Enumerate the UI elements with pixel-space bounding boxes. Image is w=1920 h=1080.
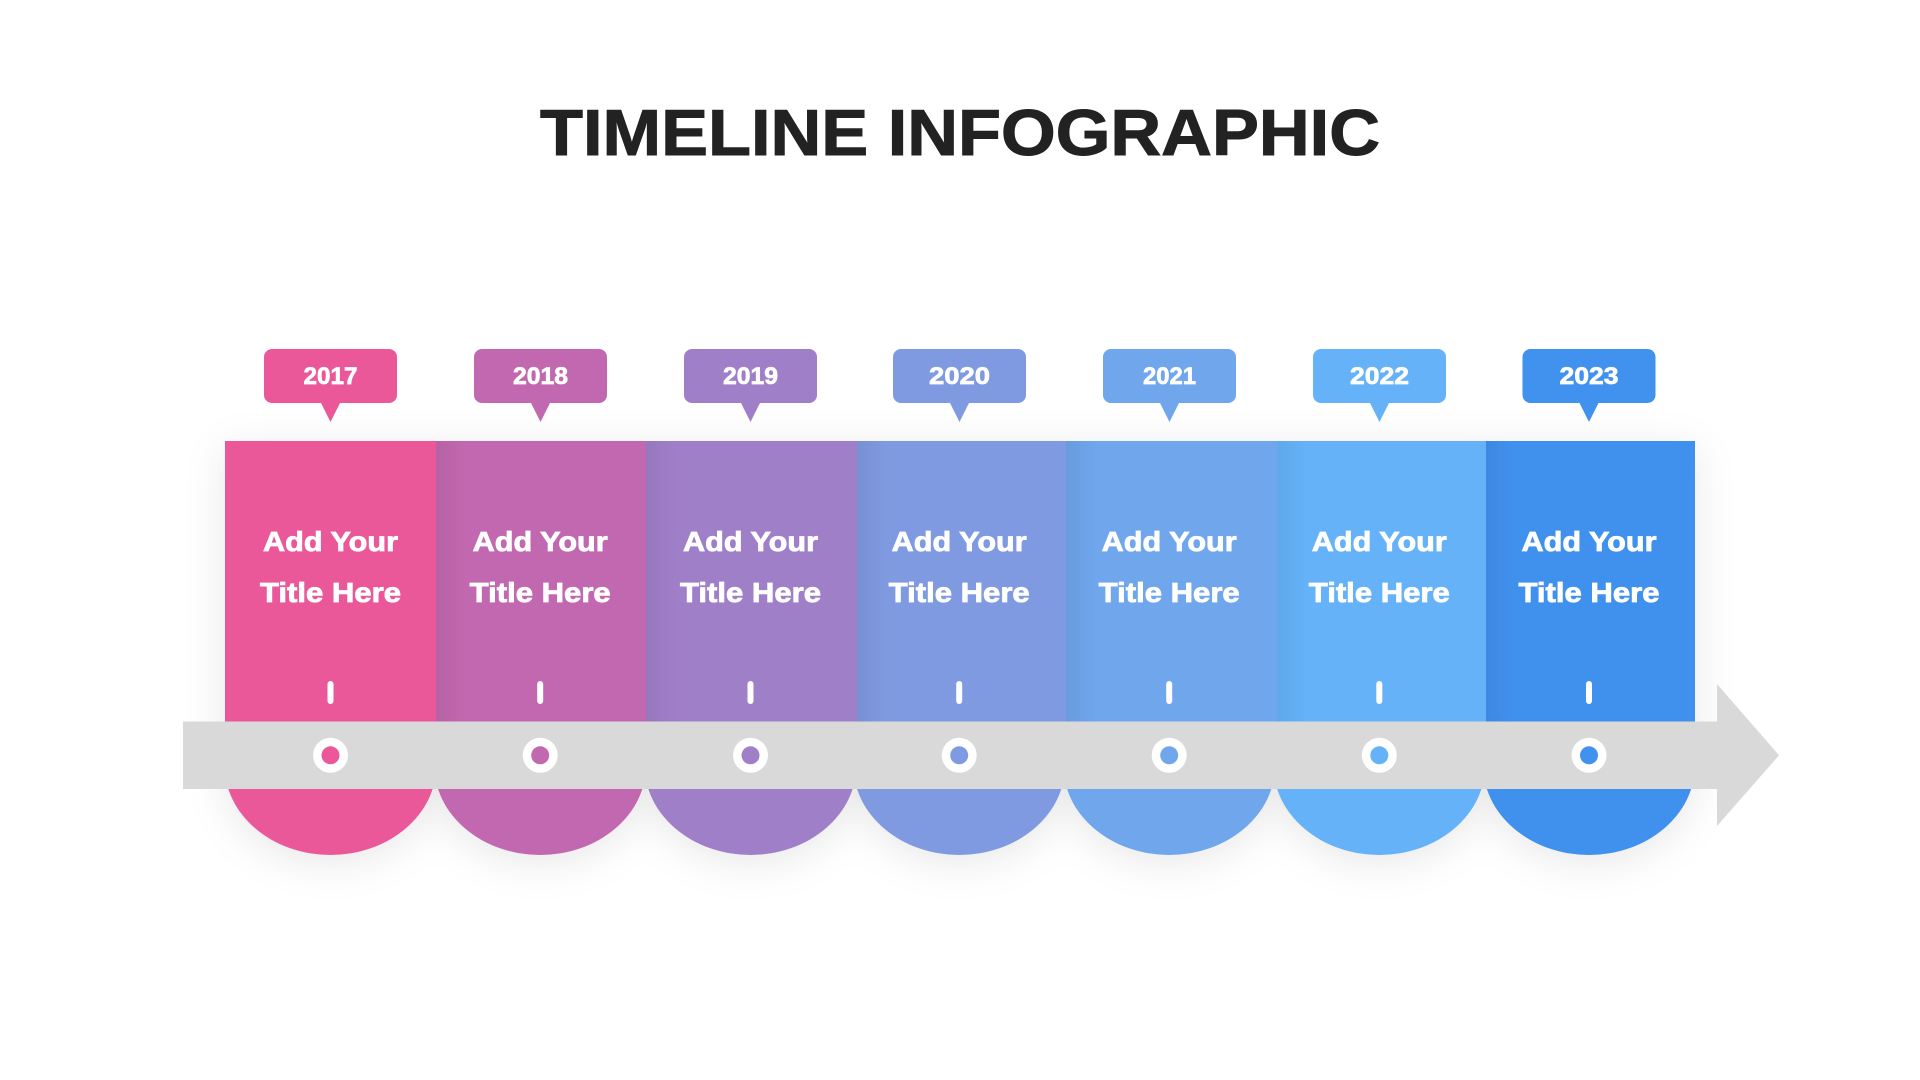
badge: 2018 [474,349,607,422]
tick marks [328,681,1592,704]
column: 2021 [1063,441,1277,855]
column title: 2018 [470,526,611,608]
column title: 2019: Add Your [683,526,818,557]
badge: 2021 [1103,349,1236,422]
column title: 2017: Title Here [260,577,401,608]
marker: 2021 [1152,738,1187,773]
column title: 2019 [680,526,821,608]
column title: 2020 [889,526,1030,608]
column title: 2018: Title Here [470,577,611,608]
column title: 2021: Title Here [1099,577,1240,608]
marker: 2019 [733,738,768,773]
badge: 2022 [1313,349,1446,422]
marker: 2020 [942,738,977,773]
badge: 2023: 2023 [1560,363,1618,390]
column: 2020 [853,441,1066,855]
column title: 2023: Add Your [1522,526,1657,557]
column title: 2018: Add Your [473,526,608,557]
column: 2023 [1483,441,1695,855]
column title: 2017 [260,526,401,608]
column: 2017 [224,441,436,855]
column title: 2022 [1309,526,1450,608]
marker: 2018 [523,738,558,773]
arrow: timeline bar [183,684,1779,826]
marker: 2017 [313,738,348,773]
column: 2018 [434,441,646,855]
column: 2022 [1273,441,1486,855]
column title: 2020: Title Here [889,577,1030,608]
marker: 2022 [1362,738,1397,773]
timeline columns [224,441,1695,855]
badge: 2017 [264,349,397,422]
column title: 2019: Title Here [680,577,821,608]
title: TIMELINE INFOGRAPHIC [540,96,1380,169]
column title: 2021: Add Your [1102,526,1237,557]
badge: 2017: 2017 [304,363,358,390]
column title: 2023: Title Here [1518,577,1660,608]
marker: 2023 [1572,738,1606,773]
badge: 2019 [684,349,817,422]
column title: 2017: Add Your [263,526,398,557]
badge: 2022: 2022 [1350,363,1409,390]
column title: 2023 [1518,526,1660,608]
column title: 2022: Add Your [1312,526,1447,557]
badge: 2020 [893,349,1026,422]
badge: 2018: 2018 [513,363,568,390]
badge: 2019: 2019 [723,363,778,390]
column title: 2022: Title Here [1309,577,1450,608]
column: 2019 [644,441,857,855]
badge: 2021: 2021 [1143,363,1196,390]
badge: 2023 [1522,349,1656,422]
badge: 2020: 2020 [929,363,990,390]
column title: 2020: Add Your [892,526,1027,557]
column title: 2021 [1099,526,1240,608]
